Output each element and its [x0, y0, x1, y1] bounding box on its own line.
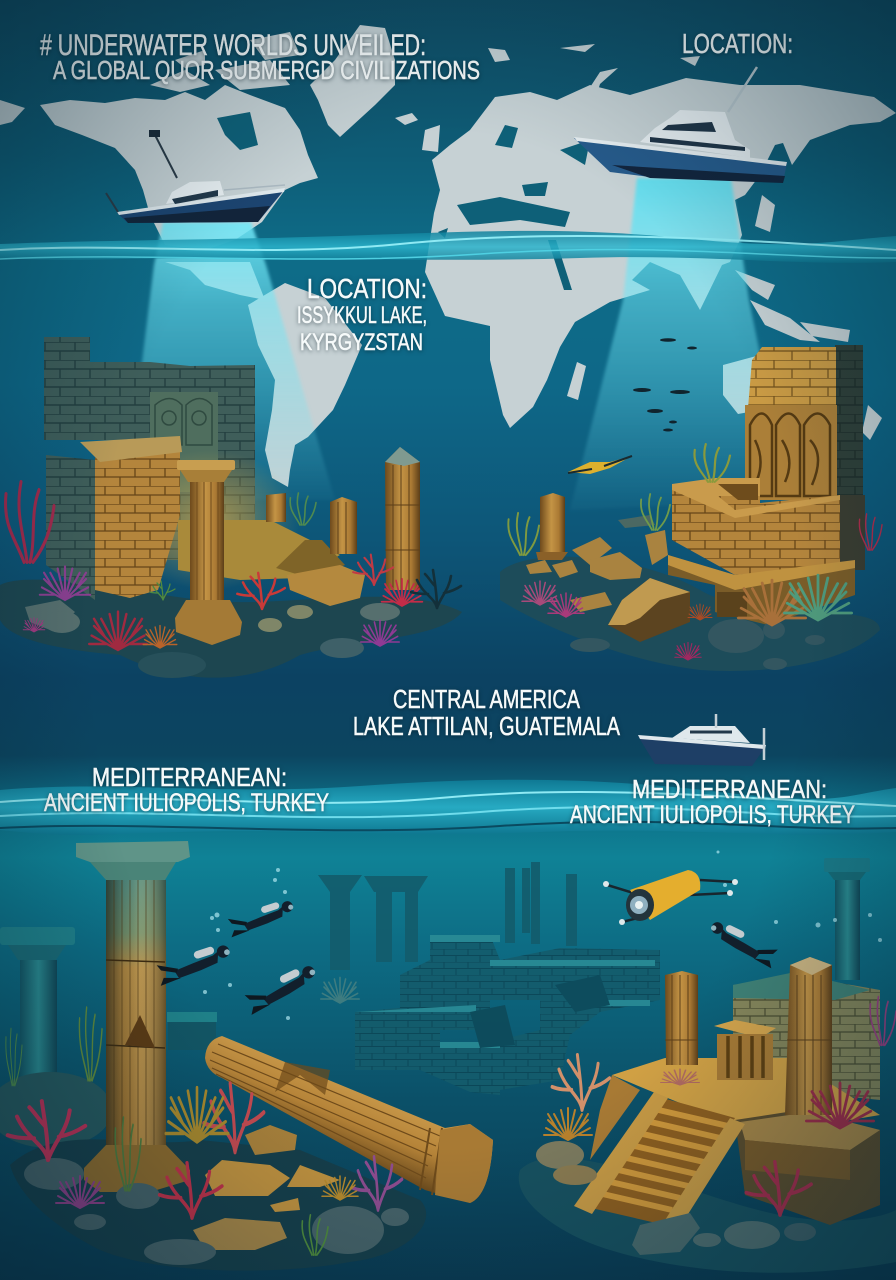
- big foreground column: [76, 841, 190, 1192]
- sunken city in the distance: [318, 862, 660, 1095]
- lower water surface waves: [0, 780, 896, 835]
- north america: [40, 85, 318, 250]
- arctic canada islands: [150, 32, 300, 92]
- paving stones: [24, 1125, 409, 1265]
- tower brick top: [748, 347, 836, 408]
- rising bubbles: [203, 850, 882, 1020]
- iceland: [395, 113, 418, 125]
- distant columns: [318, 862, 577, 970]
- lower right lit seabed: [519, 1158, 896, 1273]
- south-east asia islands: [735, 270, 850, 342]
- stepped teal ruins: [400, 935, 540, 1015]
- small yellow ROV: [568, 456, 632, 474]
- rocks: [536, 1141, 816, 1255]
- south america: [248, 283, 362, 487]
- label: Issyk-Kul lake: ISSYKKUL LAKE,: [297, 302, 427, 329]
- australia: [723, 355, 760, 414]
- fish school: [633, 338, 697, 432]
- label: Mediterranean right: [570, 774, 855, 829]
- platform left block: [590, 1075, 640, 1160]
- platform top: [612, 1058, 880, 1135]
- lower left seabed island: [10, 1139, 426, 1271]
- japan: [755, 195, 775, 232]
- title: # UNDERWATER WORLDS UNVEILED:: [40, 29, 426, 62]
- seabed: [0, 580, 462, 678]
- tall gold column: [785, 957, 832, 1115]
- seaweed lower left: [6, 1008, 102, 1085]
- foreground column: [175, 460, 242, 645]
- right block: [735, 1110, 880, 1225]
- new zealand: [862, 405, 882, 440]
- tall broken column: [385, 447, 420, 590]
- light beam: right ship: [570, 178, 790, 510]
- stairs: [574, 1092, 745, 1230]
- back wall: [733, 975, 880, 1100]
- light beam: left ship: [125, 222, 335, 500]
- right ruin island: [500, 345, 882, 671]
- label: location top right: LOCATION:: [682, 28, 793, 59]
- small teal shrine: [167, 1012, 217, 1050]
- short column: [536, 493, 568, 560]
- small research ship: centre: [638, 714, 766, 766]
- corals: [6, 482, 54, 562]
- alaska tip: [0, 100, 25, 125]
- plinth: [668, 555, 855, 625]
- fallen column: [205, 1036, 493, 1203]
- tower dark side: [835, 345, 863, 560]
- greenland: [310, 25, 395, 137]
- label: Mediterranean left: ANCIENT IULIOPOLIS, TURKEY: [44, 789, 329, 817]
- world map: [0, 25, 896, 487]
- label: Mediterranean left: MEDITERRANEAN:: [92, 762, 287, 792]
- big cracked boulder: [608, 578, 690, 642]
- left ruin island: [0, 337, 462, 678]
- right gold ruin: [536, 957, 880, 1255]
- label: Central America: [353, 684, 620, 741]
- inland seas on the map: [217, 112, 590, 290]
- corals lower: [8, 977, 896, 1255]
- label: Issyk-Kul lake: KYRGYZSTAN: [300, 329, 423, 356]
- seabed: [500, 557, 880, 671]
- far left teal column: [0, 927, 75, 1085]
- arctic russia islands: [488, 44, 700, 100]
- carved panels: [150, 392, 218, 492]
- corals: [508, 513, 539, 555]
- back stone wall: [44, 337, 255, 560]
- central america: [165, 262, 265, 300]
- carved panels: [745, 405, 837, 500]
- research ship: left: [106, 130, 285, 223]
- stepped platform: [178, 520, 340, 580]
- mound behind column: [0, 1072, 112, 1148]
- small shrine: [714, 1020, 776, 1080]
- label: Issyk-Kul lake: LOCATION:: [307, 273, 427, 304]
- short columns: [266, 493, 357, 554]
- gold brick base: [672, 478, 840, 575]
- label: Issyk-Kul lake: [297, 273, 427, 356]
- far right teal column: [824, 858, 870, 980]
- interior glow: [120, 450, 300, 590]
- left dark wall: [46, 455, 95, 600]
- divers: [155, 900, 781, 1015]
- boulders: [526, 515, 668, 612]
- madagascar: [567, 362, 586, 400]
- title: A GLOBAL QUOR SUBMERGD CIVILIZATIONS: [53, 55, 480, 85]
- yellow ROV: [603, 870, 738, 925]
- top water surface waves: [0, 231, 896, 263]
- short gold column: [665, 971, 698, 1065]
- grey rocks: [570, 619, 825, 670]
- label: Mediterranean right: MEDITERRANEAN:: [632, 774, 827, 804]
- rocks: [25, 600, 400, 678]
- label: Central America: LAKE ATTILAN, GUATEMALA: [353, 711, 620, 741]
- gold brick block: [95, 440, 180, 598]
- british isles: [422, 125, 440, 152]
- eurasia and africa: [425, 78, 896, 428]
- title: [40, 29, 480, 85]
- label: Central America: CENTRAL AMERICA: [393, 684, 581, 714]
- research ship: right: [574, 67, 787, 183]
- label: Mediterranean left: [44, 762, 329, 817]
